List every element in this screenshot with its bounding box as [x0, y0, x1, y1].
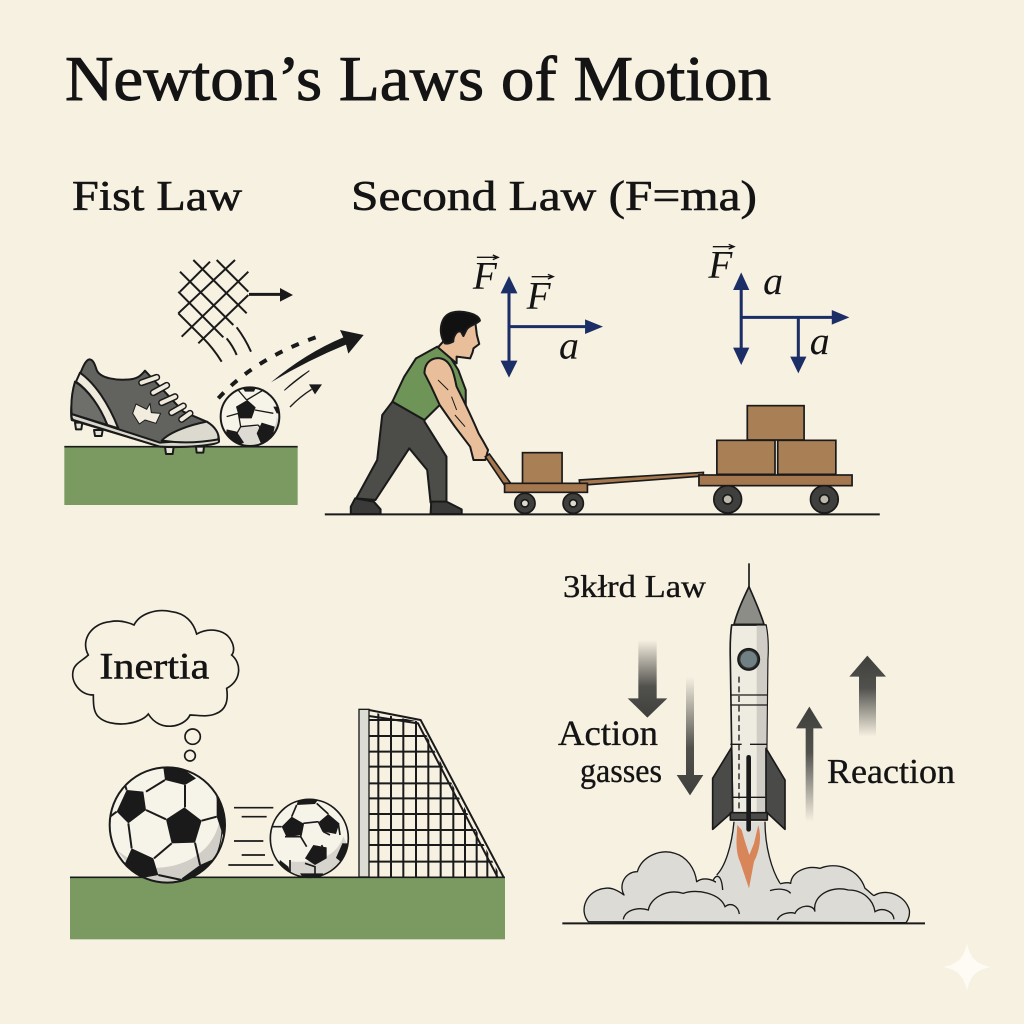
thought bubbles: [185, 729, 200, 761]
panel: first law kick illustration: [64, 260, 364, 505]
thought cloud: [73, 611, 239, 726]
heading: second law: Second Law (F=ma): [351, 174, 757, 220]
small cart with one box: [485, 453, 703, 513]
panel: third law rocket illustration: [562, 563, 925, 923]
plume edges: [717, 822, 780, 883]
rocket: [713, 563, 785, 829]
panel: inertia illustration: [70, 611, 505, 939]
label: action: Action: [558, 713, 658, 753]
inertia label: Inertia: [99, 647, 210, 688]
ground line: [562, 920, 925, 926]
vector labels: F: [472, 255, 498, 297]
soccer goal: [359, 709, 503, 877]
kicked soccer ball: [220, 386, 280, 446]
label: reaction: Reaction: [827, 752, 955, 791]
ground line: [325, 511, 880, 517]
smoke interior lines: [623, 876, 894, 920]
label: third law: 3kłrd Law: [563, 568, 706, 604]
vector labels: [472, 244, 830, 367]
arrow: reaction small: [796, 707, 823, 822]
vector labels: a: [763, 259, 783, 303]
heading: first law: Fist Law: [72, 174, 243, 220]
grass block: [70, 877, 505, 939]
smoke clouds: [584, 852, 909, 923]
exhaust plume: [713, 822, 782, 900]
large cart with three boxes: [699, 406, 852, 513]
force vector diagram left: [501, 276, 603, 378]
vector labels: F: [707, 244, 734, 286]
man pushing: [351, 312, 488, 514]
arrow: action small: [677, 677, 703, 795]
vector labels: F: [526, 275, 552, 317]
flame: [737, 825, 760, 888]
vector labels: a: [810, 319, 830, 363]
speed lines: [228, 808, 273, 865]
panel: second law cart illustration: [325, 244, 880, 514]
grass block: [64, 447, 298, 505]
large soccer ball: [110, 765, 228, 887]
dashed trajectory: [218, 335, 323, 398]
net with arrow: [178, 260, 293, 362]
soccer cleat: [71, 359, 219, 454]
vector labels: a: [559, 324, 579, 367]
arrow: action large: [628, 640, 667, 718]
arrow: reaction large: [849, 656, 886, 737]
icon: sparkle: [943, 943, 991, 991]
force vector diagram right: [733, 272, 849, 373]
curved motion arrows: [271, 330, 364, 407]
label: gasses: gasses: [580, 753, 662, 790]
title: Newton’s Laws of Motion: [65, 43, 771, 114]
small soccer ball: [270, 799, 350, 878]
